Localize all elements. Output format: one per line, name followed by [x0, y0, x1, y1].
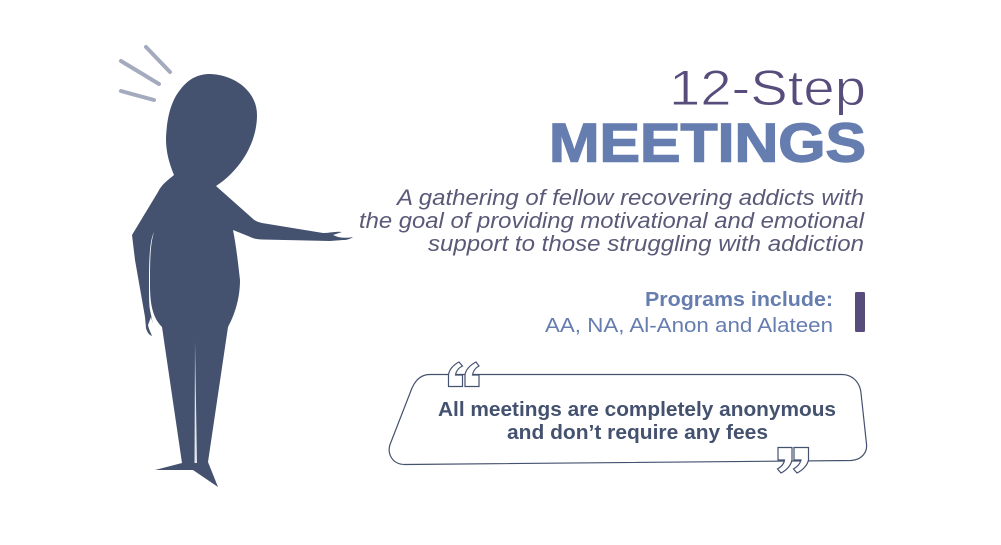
quote text	[438, 399, 836, 444]
description text	[359, 185, 865, 256]
icon: emphasis rays	[121, 47, 170, 100]
leg gap	[194, 341, 197, 463]
accent bar	[855, 292, 865, 332]
quote bubble	[389, 374, 867, 464]
description text: the goal of providing motivational and emotional	[359, 208, 865, 233]
title: 12-Step: 12-Step	[669, 60, 866, 116]
programs text	[545, 289, 833, 337]
programs text: AA, NA, Al-Anon and Alateen	[545, 315, 833, 337]
quote text: and don’t require any fees	[507, 422, 768, 444]
title: MEETINGS: MEETINGS	[549, 111, 866, 173]
description text: A gathering of fellow recovering addicts with	[395, 185, 864, 210]
quote text: All meetings are completely anonymous	[438, 399, 836, 421]
icon: closing quote	[778, 448, 808, 473]
figure: person pointing	[132, 74, 353, 487]
description text: support to those struggling with addiction	[428, 231, 864, 256]
icon: opening quote	[448, 362, 479, 386]
programs text: Programs include:	[645, 289, 833, 311]
